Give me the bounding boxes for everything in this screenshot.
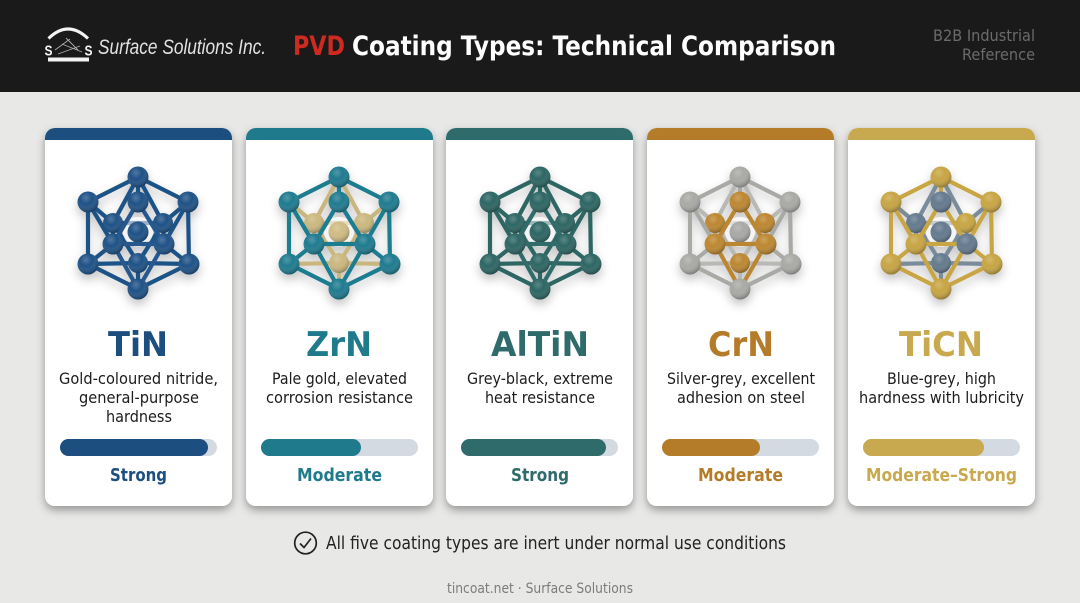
header note xyxy=(933,26,1035,64)
icon: CrN lattice xyxy=(680,166,802,300)
rating bar xyxy=(662,439,819,456)
description: Silver-grey, excellent xyxy=(667,369,815,388)
description: Gold-coloured nitride, xyxy=(59,369,218,388)
logo: Surface Solutions Inc. xyxy=(44,29,266,62)
heading: CrN xyxy=(708,325,774,365)
description: Pale gold, elevated xyxy=(272,369,407,388)
description: heat resistance xyxy=(485,388,595,407)
description: hardness xyxy=(106,407,172,426)
description xyxy=(667,369,815,407)
logo: Surface Solutions Inc.: S xyxy=(44,42,52,60)
icon: check circle xyxy=(295,532,316,554)
description xyxy=(266,369,413,407)
description: hardness with lubricity xyxy=(859,388,1024,407)
callout: inert note: All five coating types are inert under normal use conditions xyxy=(326,533,786,554)
header note: Reference xyxy=(962,45,1035,64)
description: Blue-grey, high xyxy=(887,369,996,388)
rating bar xyxy=(261,439,418,456)
rating bar xyxy=(60,439,217,456)
panel: AlTiN xyxy=(446,128,633,506)
logo: Surface Solutions Inc.: S xyxy=(84,42,92,60)
icon: TiCN lattice xyxy=(880,166,1002,300)
heading: TiN xyxy=(108,325,168,365)
description: adhesion on steel xyxy=(677,388,805,407)
description: corrosion resistance xyxy=(266,388,413,407)
header note: B2B Industrial xyxy=(933,26,1035,45)
panel: TiCN xyxy=(848,128,1035,506)
icon: AlTiN lattice xyxy=(480,166,602,300)
rating label: Moderate xyxy=(297,465,382,486)
logo: Surface Solutions Inc.: Surface Solutions Inc. xyxy=(98,36,266,59)
header band xyxy=(0,0,1080,92)
title: PVD xyxy=(293,31,345,62)
description xyxy=(859,369,1024,407)
rating label: Moderate xyxy=(698,465,783,486)
icon: TiN lattice xyxy=(78,166,200,300)
rating label: Moderate–Strong xyxy=(866,465,1017,486)
rating label: Strong xyxy=(110,465,167,486)
heading: AlTiN xyxy=(491,325,589,365)
rating label: Strong xyxy=(511,465,569,486)
panel: TiN xyxy=(45,128,232,506)
description: Grey-black, extreme xyxy=(467,369,613,388)
footer: tincoat.net · Surface Solutions xyxy=(447,581,633,597)
title: Coating Types: Technical Comparison xyxy=(352,31,836,62)
description: general-purpose xyxy=(79,388,199,407)
rating bar xyxy=(863,439,1020,456)
description xyxy=(59,369,218,426)
panel: ZrN xyxy=(246,128,433,506)
icon: ZrN lattice xyxy=(278,166,400,300)
description xyxy=(467,369,613,407)
panel: CrN xyxy=(647,128,834,506)
rating bar xyxy=(461,439,618,456)
heading: ZrN xyxy=(306,325,372,365)
heading: TiCN xyxy=(899,325,983,365)
